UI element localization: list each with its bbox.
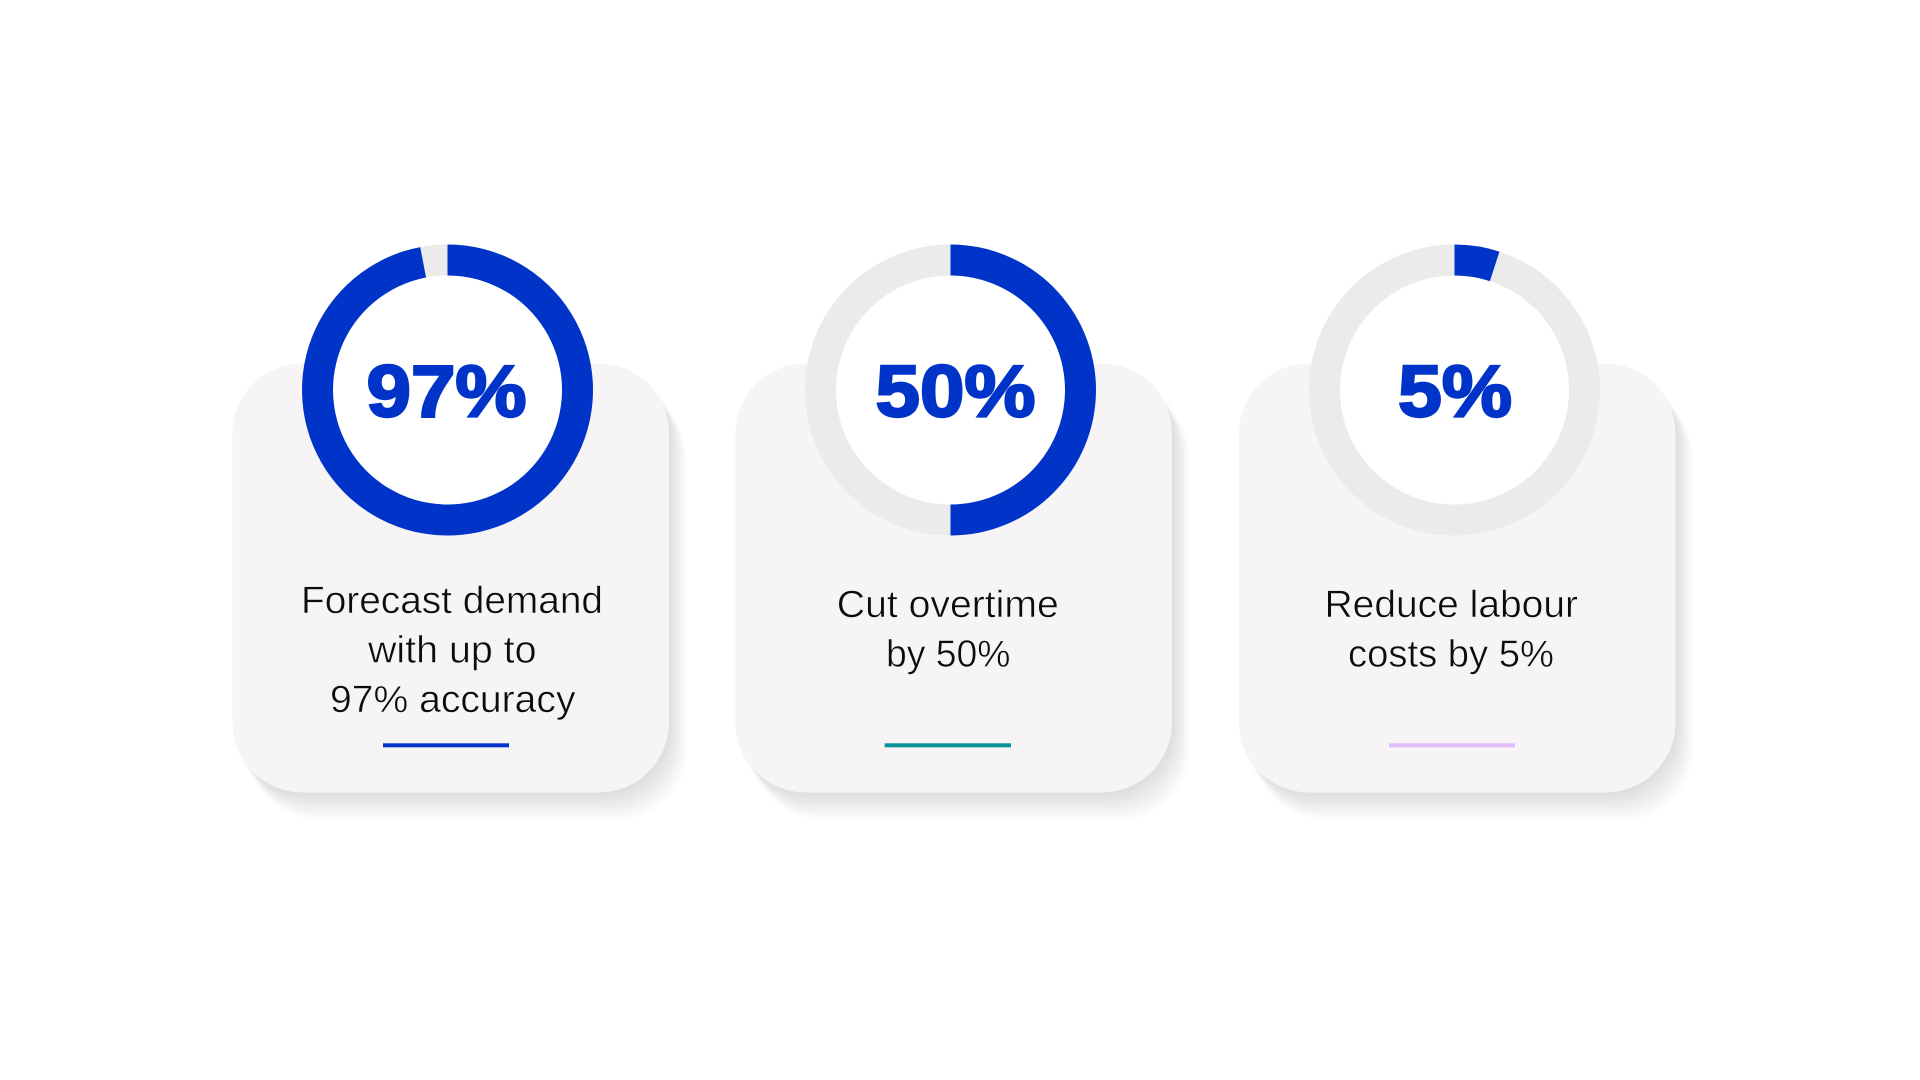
description: 97% accuracy <box>330 679 576 721</box>
panel: reduce labour costs card <box>1239 244 1693 820</box>
accent line: blue <box>383 743 509 747</box>
card background <box>736 364 1172 792</box>
value: 50%: 50% <box>876 351 1036 432</box>
value: 97%: 97% <box>366 351 526 432</box>
card shadow <box>1240 365 1693 820</box>
description <box>301 580 603 721</box>
donut chart: 97% <box>302 244 593 536</box>
card shadow <box>737 365 1190 820</box>
card shadow <box>234 365 687 820</box>
card background <box>1239 364 1676 792</box>
description: Cut overtime <box>837 584 1059 626</box>
card background <box>232 364 669 792</box>
donut chart: 50% <box>820 244 1096 536</box>
value: 5%: 5% <box>1398 351 1512 432</box>
accent line: lilac <box>1389 743 1515 747</box>
panel: forecast demand card <box>232 244 687 820</box>
description: with up to <box>367 630 536 672</box>
accent line: teal <box>885 743 1011 747</box>
description: costs by 5% <box>1348 634 1554 676</box>
donut chart: 5% <box>1324 244 1584 520</box>
panel: cut overtime card <box>736 244 1190 820</box>
description: Forecast demand <box>301 580 603 622</box>
description: by 50% <box>886 634 1010 676</box>
description: Reduce labour <box>1324 584 1578 626</box>
description <box>1324 584 1578 676</box>
description <box>837 584 1059 676</box>
